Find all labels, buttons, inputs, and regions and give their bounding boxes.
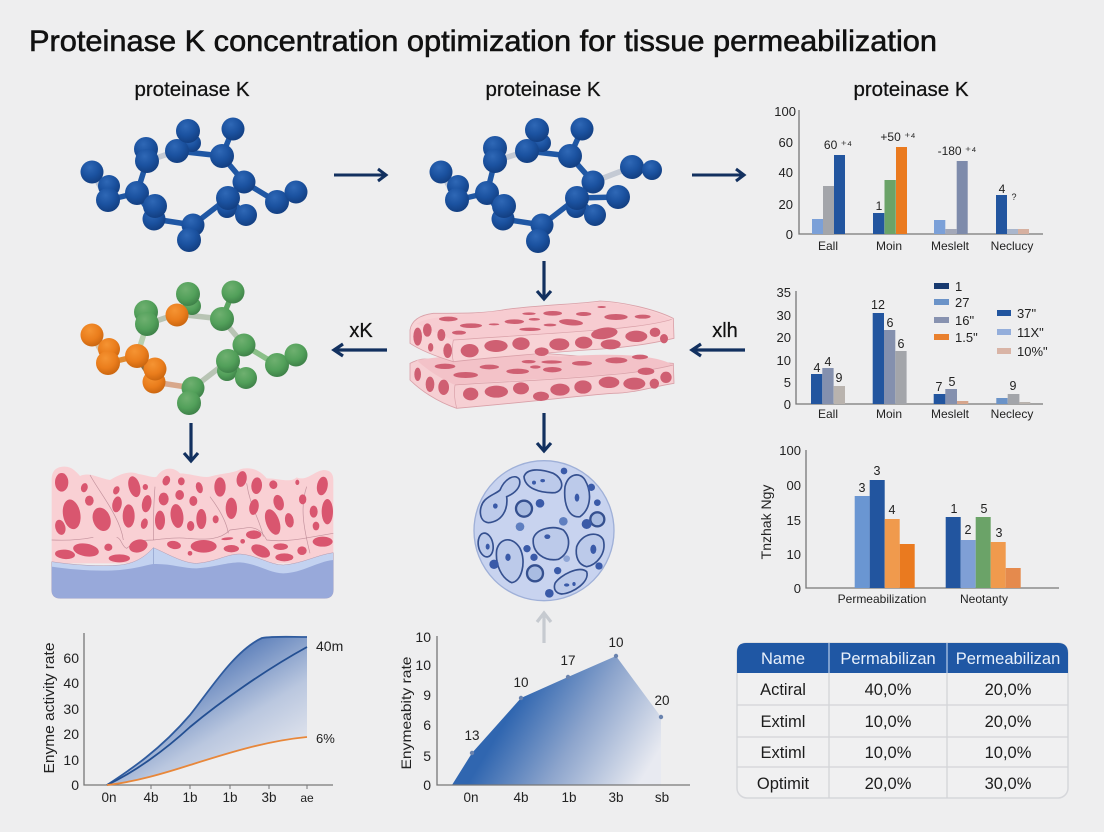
table header [737,643,1068,673]
bar chart: middle right: 20 [777,330,791,345]
label: xK: xK [349,320,373,342]
bar chart: top right: Neclucy [991,239,1033,253]
bar chart: middle right: 0 [784,397,791,412]
table rows: 10,0% [985,744,1032,762]
area chart: enzyme permeability rate: Enymeabity rate [398,656,414,770]
bar chart: middle right: 6 [898,337,905,351]
bar chart: top right: 60 ⁺⁴ [824,138,852,152]
arrow: molecule to molecule [334,169,386,181]
line chart: enzyme activity rate: 1b [222,790,238,805]
bar chart: top right: ? [1011,192,1017,202]
area chart: enzyme permeability rate: 10 [415,657,431,673]
legend: left group: 1.5" [955,330,978,345]
area chart: enzyme permeability rate: 10 [415,629,431,645]
legend: left group: 1 [955,279,962,294]
area chart: enzyme permeability rate: 13 [464,728,480,743]
table rows: Actiral [760,681,806,699]
bar chart: middle right: 10 [777,353,791,368]
table [737,643,1068,798]
bar chart: middle right: 5 [784,375,791,390]
arrow: molecule down to epithelium [184,423,198,461]
arrow: molecule down to tissue [537,261,551,299]
table rows: Extiml [761,713,805,731]
line chart: enzyme activity rate: 0n [101,790,117,805]
bar chart: lower right: 100 [779,443,801,458]
line chart: enzyme activity rate [41,633,343,805]
bar chart: middle right: 35 [777,285,791,300]
bar chart: middle right: 12 [871,298,885,312]
bar chart: lower right: Tnzhak Ngy [758,485,774,559]
table rows: 30,0% [985,775,1032,793]
bar chart: top right: 20 [779,197,793,212]
area chart: enzyme permeability rate: 9 [423,687,431,703]
bar chart: lower right: 0 [794,581,801,596]
bar chart: lower right: 3 [996,526,1003,540]
bar chart: top right: 100 [774,104,796,119]
illustration: epithelium cross-section [52,467,333,598]
legend: left group: 16" [955,313,974,328]
table rows: 20,0% [985,681,1032,699]
legend: right group: 10%" [1017,344,1048,359]
table header: Permabilizan [840,650,936,668]
area chart: enzyme permeability rate: 0 [423,777,431,793]
line chart: enzyme activity rate: 10 [63,752,79,768]
table header: Name [761,650,805,668]
table rows: Extiml [761,744,805,762]
line chart: enzyme activity rate: 30 [63,701,79,717]
legend: left group [934,279,978,345]
area chart: enzyme permeability rate: 6 [423,717,431,733]
heading: centre column: proteinase K [485,78,601,101]
area chart: enzyme permeability rate: 17 [560,653,576,668]
bar chart: middle right: 5 [949,375,956,389]
bar chart: middle right: 4 [825,355,832,369]
heading: right column: proteinase K [853,78,969,101]
table rows: 10,0% [865,744,912,762]
bar chart: top right: Moin [876,239,902,253]
bar chart: top right: 0 [786,227,793,242]
title: Proteinase K concentration optimization for tissue permeabilization [29,25,937,58]
icon: blue molecule left [80,118,308,252]
area chart: enzyme permeability rate: 5 [423,748,431,764]
illustration: tissue slabs [410,301,674,408]
table rows: 40,0% [865,681,912,699]
line chart: enzyme activity rate: Enyme activity rate [41,642,58,774]
bar chart: middle right: 9 [836,371,843,385]
bar chart: middle right: 7 [936,380,943,394]
area chart: enzyme permeability rate: 3b [608,790,624,805]
bar chart: top right: +50 ⁺⁴ [880,130,916,144]
arrow: chart up to cell [537,613,551,643]
heading: left column: proteinase K [134,78,250,101]
bar chart: lower right: 5 [981,502,988,516]
bar chart: middle right: 30 [777,308,791,323]
line chart: enzyme activity rate: 1b [182,790,198,805]
bar chart: middle right: Moin [876,407,902,421]
bar chart: lower right: 15 [787,513,801,528]
bar chart: middle right: Meslelt [931,407,970,421]
arrow: tissue down to cell [537,413,551,451]
area chart: enzyme permeability rate: sb [655,790,669,805]
bar chart: middle right: 6 [887,316,894,330]
icon: orange and green molecule [80,280,308,415]
illustration: circular cell micrograph [474,461,614,601]
table rows: 10,0% [865,713,912,731]
bar chart: top right: 60 [779,135,793,150]
area chart: enzyme permeability rate: 4b [513,790,529,805]
area chart: enzyme permeability rate: 10 [608,635,624,650]
legend: left group: 27 [955,295,969,310]
line chart: enzyme activity rate: 0 [71,777,79,793]
line chart: enzyme activity rate: 60 [63,650,79,666]
arrow: chart left to tissue [692,344,745,356]
area chart: enzyme permeability rate: 0n [463,790,479,805]
table rows [757,681,1032,793]
bar chart: top right: 4 [999,182,1006,196]
bar chart: top right: 40 [779,165,793,180]
arrow: molecule to chart [692,169,744,181]
area chart: enzyme permeability rate: 20 [654,693,670,708]
table rows: 20,0% [985,713,1032,731]
table rows: Optimit [757,775,810,793]
legend: right group: 37" [1017,306,1036,321]
bar chart: top right: Eall [818,239,838,253]
arrow: tissue left to molecule [334,344,387,356]
line chart: enzyme activity rate: ae [300,791,314,805]
bar chart: lower right: 00 [787,478,801,493]
bar chart: middle right: 4 [814,361,821,375]
area chart: enzyme permeability rate: 10 [513,675,529,690]
bar chart: lower right [758,443,1059,606]
bar chart: middle right: 9 [1010,379,1017,393]
table header: Permeabilizan [956,650,1060,668]
line chart: enzyme activity rate: 4b [143,790,159,805]
bar chart: lower right: 4 [889,503,896,517]
bar chart: lower right: Neotanty [960,592,1008,606]
line chart: enzyme activity rate: 40m [316,638,343,654]
bar chart: lower right: 10 [787,547,801,562]
bar chart: top right: Meslelt [931,239,970,253]
area chart: enzyme permeability rate: 1b [561,790,577,805]
icon: blue molecule centre [430,118,662,253]
bar chart: top right [774,104,1043,253]
area chart: enzyme permeability rate [398,629,690,805]
label: xlh: xlh [712,320,738,342]
legend: right group [997,306,1048,359]
bar chart: lower right: 2 [965,523,972,537]
bar chart: middle right: Eall [818,407,838,421]
bar chart: top right: -180 ⁺⁴ [938,144,976,158]
bar chart: top right: 1 [876,199,883,213]
line chart: enzyme activity rate: 6% [316,731,335,746]
line chart: enzyme activity rate: 3b [261,790,277,805]
bar chart: lower right: Permeabilization [838,592,926,606]
bar chart: lower right: 3 [874,464,881,478]
legend: right group: 11X" [1017,325,1044,340]
bar chart: lower right: 3 [859,481,866,495]
line chart: enzyme activity rate: 40 [63,675,79,691]
bar chart: lower right: 1 [951,502,958,516]
bar chart: middle right [777,279,1048,421]
line chart: enzyme activity rate: 20 [63,726,79,742]
bar chart: middle right: Neclecy [991,407,1033,421]
table rows: 20,0% [865,775,912,793]
